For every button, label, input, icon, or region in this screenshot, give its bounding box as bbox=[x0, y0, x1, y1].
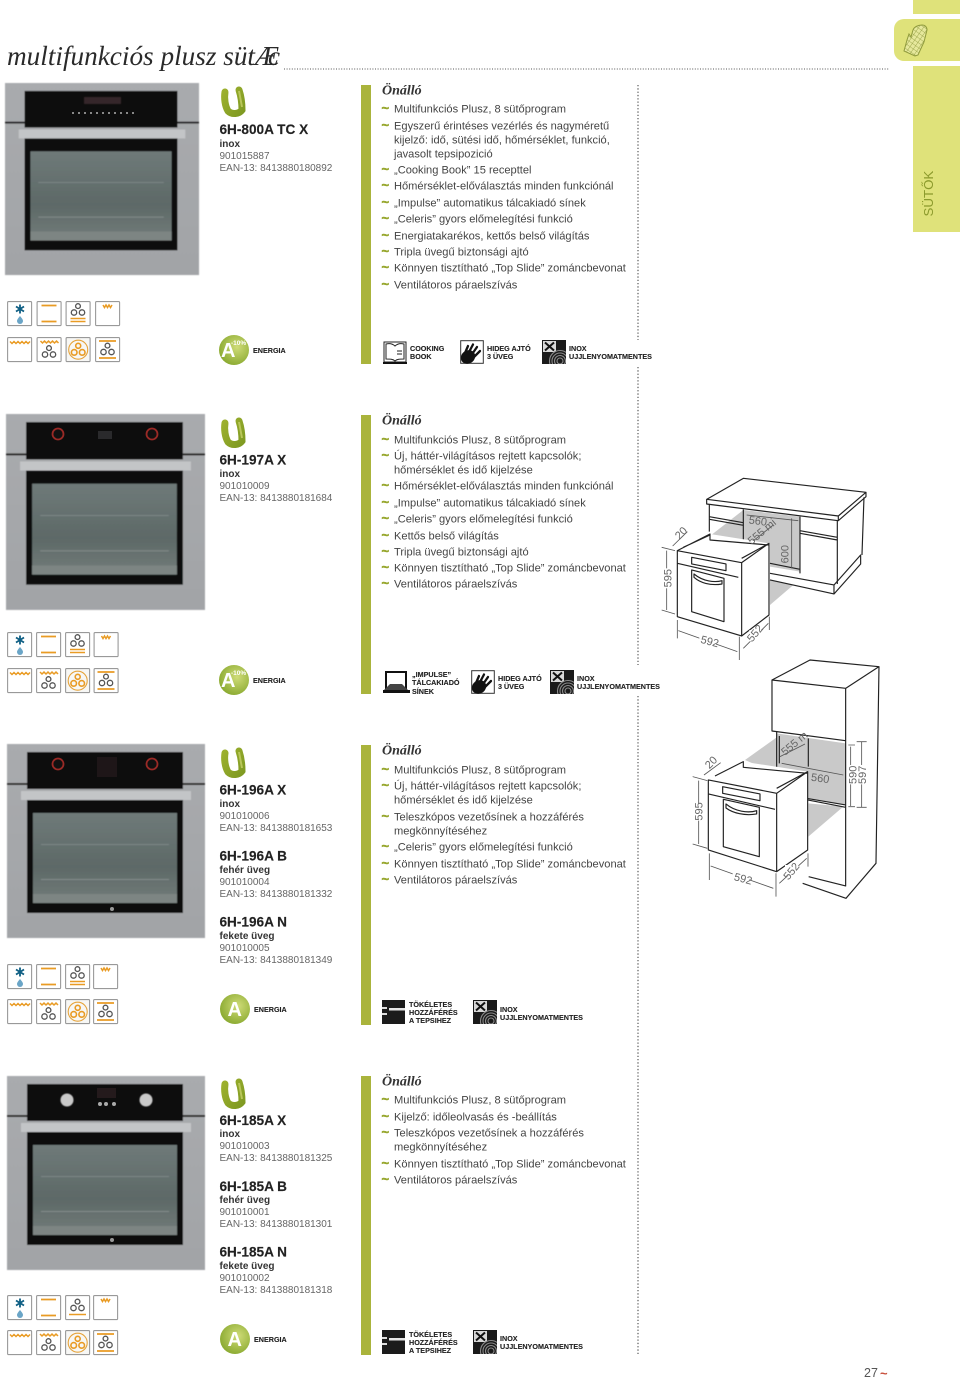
feature list: ~ bbox=[382, 778, 390, 792]
feature list bbox=[382, 742, 626, 886]
dimensions: 590 bbox=[848, 766, 860, 784]
feature: cold door: 3 ÜVEG bbox=[487, 352, 514, 361]
feature list: ~ bbox=[382, 1108, 390, 1124]
model info: 901010005 bbox=[220, 943, 270, 954]
model info: 901010006 bbox=[220, 811, 270, 822]
feature list bbox=[382, 412, 626, 590]
model info: fekete üveg bbox=[220, 931, 275, 942]
feature: cooking book: COOKING bbox=[410, 344, 445, 353]
dimensions: 552 bbox=[781, 861, 802, 883]
feature list: „Cooking Book” 15 recepttel bbox=[394, 164, 532, 176]
oven photo bbox=[7, 1076, 205, 1270]
feature list: Multifunkciós Plusz, 8 sütőprogram bbox=[394, 1094, 566, 1106]
feature list: Önálló bbox=[382, 742, 422, 758]
model info: EAN-13: 8413880181301 bbox=[220, 1219, 333, 1230]
feature: impulse rails bbox=[383, 670, 460, 696]
brand logo bbox=[225, 421, 242, 445]
feature list: Könnyen tisztítható „Top Slide” zománcbevonat bbox=[394, 262, 626, 274]
model info: EAN-13: 8413880181318 bbox=[220, 1285, 333, 1296]
energy badge: ENERGIA bbox=[254, 1335, 287, 1344]
model info: 901015887 bbox=[220, 151, 270, 162]
feature list: Hőmérséklet-előválasztás minden funkciónál bbox=[394, 480, 614, 492]
feature: cold door: HIDEG AJTÓ bbox=[498, 674, 542, 683]
energy badge: A bbox=[228, 1329, 242, 1351]
feature list: ~ bbox=[382, 560, 390, 574]
dimensions: 555 mi bbox=[746, 517, 779, 547]
feature list: Könnyen tisztítható „Top Slide” zománcbevonat bbox=[394, 1158, 626, 1170]
feature list: kijelző: idő, sütési idő, hőmérséklet, funkció, bbox=[394, 134, 610, 146]
feature list: ~ bbox=[382, 210, 390, 226]
side tab: section label bbox=[913, 66, 960, 232]
energy badge bbox=[220, 994, 287, 1024]
page number: ~ bbox=[880, 1366, 888, 1381]
oven photo bbox=[6, 414, 205, 610]
feature list: ~ bbox=[382, 194, 390, 210]
energy badge: A bbox=[221, 670, 235, 692]
dimensions: 552 bbox=[745, 623, 766, 645]
green bar bbox=[361, 415, 371, 694]
oven photo bbox=[7, 744, 205, 938]
feature: fingerprint-free inox: INOX bbox=[569, 344, 587, 353]
model info bbox=[220, 1113, 333, 1296]
model info bbox=[220, 122, 333, 174]
brand logo bbox=[225, 1082, 242, 1106]
dimensions: 597 bbox=[857, 766, 869, 784]
dimensions: 592 bbox=[733, 871, 753, 888]
model info: 6H-800A TC X bbox=[220, 122, 308, 137]
model info: fehér üveg bbox=[220, 865, 270, 876]
feature list: Ventilátoros páraelszívás bbox=[394, 280, 518, 292]
cabinet bbox=[707, 478, 866, 605]
feature list: Teleszkópos vezetősínek a hozzáférés bbox=[394, 812, 584, 824]
energy badge: ENERGIA bbox=[253, 676, 286, 685]
feature list: „Celeris” gyors előmelegítési funkció bbox=[394, 842, 573, 854]
title: multifunkciós plusz süt bbox=[7, 41, 257, 71]
feature list: Ventilátoros páraelszívás bbox=[394, 1174, 518, 1186]
model info bbox=[220, 452, 333, 504]
oven unit bbox=[677, 534, 769, 636]
feature list: „Impulse” automatikus tálcakiadó sínek bbox=[394, 498, 586, 510]
energy badge: ENERGIA bbox=[253, 346, 286, 355]
feature: cold door bbox=[458, 341, 531, 367]
feature list: megkönnyítéséhez bbox=[394, 826, 487, 838]
page number bbox=[864, 1366, 888, 1381]
dimensions: 560 bbox=[810, 772, 830, 786]
feature list: ~ bbox=[382, 838, 390, 854]
feature: fingerprint-free inox: UJJLENYOMATMENTES bbox=[500, 1342, 583, 1351]
side tab: section label: SÜTŐK bbox=[921, 171, 936, 216]
feature list: ~ bbox=[382, 100, 390, 116]
feature: full access bbox=[382, 1330, 458, 1355]
side tab: oven mitt icon bbox=[894, 19, 960, 61]
feature list: Teleszkópos vezetősínek a hozzáférés bbox=[394, 1128, 584, 1140]
feature list: ~ bbox=[382, 544, 390, 558]
feature: cooking book: BOOK bbox=[410, 352, 432, 361]
model info: 6H-196A X bbox=[220, 782, 286, 798]
feature list: Energiatakarékos, kettős belső világítás bbox=[394, 230, 590, 242]
model info: inox bbox=[220, 1129, 240, 1140]
feature list: Ventilátoros páraelszívás bbox=[394, 578, 518, 590]
model info: inox bbox=[220, 469, 240, 480]
green bar bbox=[361, 745, 371, 1025]
feature list: Könnyen tisztítható „Top Slide” zománcbevonat bbox=[394, 562, 626, 574]
model info: EAN-13: 8413880181684 bbox=[220, 493, 333, 504]
model info: EAN-13: 8413880181325 bbox=[220, 1153, 333, 1164]
feature list: ~ bbox=[382, 228, 390, 242]
panel: 6H-185A bbox=[7, 1072, 626, 1362]
model info: EAN-13: 8413880181653 bbox=[220, 823, 333, 834]
feature: fingerprint-free inox: INOX bbox=[500, 1005, 518, 1014]
dotted dividers bbox=[637, 85, 639, 1355]
green bar bbox=[361, 1076, 371, 1355]
function icons bbox=[8, 1296, 118, 1355]
dimensions: 20 bbox=[673, 525, 690, 542]
feature: fingerprint-free inox bbox=[542, 340, 652, 372]
feature: fingerprint-free inox bbox=[473, 1000, 583, 1032]
model info: EAN-13: 8413880181349 bbox=[220, 955, 333, 966]
feature: cold door: HIDEG AJTÓ bbox=[487, 344, 531, 353]
feature: fingerprint-free inox: UJJLENYOMATMENTES bbox=[569, 352, 652, 361]
feature list: ~ bbox=[382, 178, 390, 192]
model info: 6H-196A N bbox=[220, 914, 287, 930]
side tab: top strip bbox=[913, 0, 960, 14]
model info: 6H-197A X bbox=[220, 452, 286, 468]
model info: 6H-185A B bbox=[220, 1179, 287, 1194]
feature list: Önálló bbox=[382, 412, 422, 428]
model info: 901010001 bbox=[220, 1207, 270, 1218]
model info: inox bbox=[220, 139, 240, 150]
feature: impulse rails: TÁLCAKIADÓ bbox=[412, 678, 460, 687]
feature list: ~ bbox=[382, 576, 390, 590]
feature: fingerprint-free inox: UJJLENYOMATMENTES bbox=[577, 682, 660, 691]
model info: 6H-196A B bbox=[220, 848, 287, 864]
feature list: Könnyen tisztítható „Top Slide” zománcbevonat bbox=[394, 858, 626, 870]
feature list: hőmérséklet és idő kijelzése bbox=[394, 464, 533, 476]
dimensions bbox=[662, 514, 792, 660]
cabinet bbox=[745, 660, 879, 898]
feature: impulse rails: „IMPULSE” bbox=[412, 670, 452, 679]
feature list: ~ bbox=[382, 1156, 390, 1170]
energy badge bbox=[219, 335, 286, 365]
feature: full access: TÖKÉLETES bbox=[409, 1330, 452, 1339]
dimensions: 595 bbox=[694, 802, 706, 821]
panel: 6H-196A bbox=[7, 660, 879, 1032]
model info: 901010009 bbox=[220, 481, 270, 492]
feature list: „Celeris” gyors előmelegítési funkció bbox=[394, 514, 573, 526]
feature: cold door bbox=[469, 671, 542, 697]
feature list: ~ bbox=[382, 494, 390, 510]
feature list: Hőmérséklet-előválasztás minden funkciónál bbox=[394, 180, 614, 192]
feature list: ~ bbox=[382, 1124, 390, 1140]
oven photo bbox=[5, 83, 199, 275]
feature list bbox=[382, 1072, 626, 1186]
panel: 6H-197A X bbox=[6, 412, 866, 702]
energy badge bbox=[220, 1324, 287, 1354]
dimensions: 20 bbox=[703, 754, 720, 771]
feature list: ~ bbox=[382, 762, 390, 776]
model info: 6H-185A N bbox=[220, 1244, 287, 1260]
feature list: ~ bbox=[382, 528, 390, 542]
panel: 6H-800A TC X bbox=[5, 82, 652, 372]
feature: impulse rails: SÍNEK bbox=[412, 687, 435, 696]
dimensions: 600 bbox=[780, 545, 792, 563]
feature list: Kijelző: időleolvasás és -beállítás bbox=[394, 1112, 557, 1124]
feature list: Multifunkciós Plusz, 8 sütőprogram bbox=[394, 434, 566, 446]
feature list: Kettős belső világítás bbox=[394, 530, 499, 542]
feature list: ~ bbox=[382, 260, 390, 274]
model info bbox=[220, 782, 333, 966]
model info: fekete üveg bbox=[220, 1261, 275, 1272]
green bar bbox=[361, 85, 371, 364]
feature list: „Impulse” automatikus tálcakiadó sínek bbox=[394, 198, 586, 210]
energy badge: A bbox=[228, 999, 242, 1021]
dimensions: 555 m bbox=[779, 729, 810, 758]
feature list: Egyszerű érintéses vezérlés és nagyméretű bbox=[394, 120, 609, 132]
feature list: ~ bbox=[382, 510, 390, 526]
feature: fingerprint-free inox: INOX bbox=[500, 1334, 518, 1343]
feature list: „Celeris” gyors előmelegítési funkció bbox=[394, 214, 573, 226]
model info: EAN-13: 8413880181332 bbox=[220, 889, 333, 900]
energy badge: A bbox=[221, 340, 235, 362]
feature list bbox=[382, 82, 626, 292]
feature: fingerprint-free inox bbox=[473, 1330, 583, 1362]
page number: 27 bbox=[864, 1366, 878, 1380]
feature list: ~ bbox=[382, 856, 390, 870]
feature: full access: HOZZÁFÉRÉS bbox=[409, 1008, 458, 1017]
feature: full access: TÖKÉLETES bbox=[409, 1000, 452, 1009]
feature list: ~ bbox=[382, 276, 390, 292]
model info: 901010002 bbox=[220, 1273, 270, 1284]
feature list: Multifunkciós Plusz, 8 sütőprogram bbox=[394, 104, 566, 116]
feature: fingerprint-free inox bbox=[550, 670, 660, 702]
energy badge: -10% bbox=[231, 340, 246, 347]
feature list: ~ bbox=[382, 1092, 390, 1106]
feature: full access bbox=[382, 1000, 458, 1025]
feature list: ~ bbox=[382, 244, 390, 258]
model info: EAN-13: 8413880180892 bbox=[220, 163, 333, 174]
feature: fingerprint-free inox: UJJLENYOMATMENTES bbox=[500, 1013, 583, 1022]
feature list: hőmérséklet és idő kijelzése bbox=[394, 794, 533, 806]
feature list: Tripla üvegű biztonsági ajtó bbox=[394, 546, 529, 558]
feature list: ~ bbox=[382, 162, 390, 176]
function icons bbox=[8, 965, 118, 1024]
feature list: Tripla üvegű biztonsági ajtó bbox=[394, 246, 529, 258]
energy badge bbox=[219, 665, 286, 695]
feature list: ~ bbox=[382, 872, 390, 886]
feature: full access: A TEPSIHEZ bbox=[409, 1016, 452, 1025]
brand logo bbox=[225, 90, 242, 114]
feature: full access: HOZZÁFÉRÉS bbox=[409, 1338, 458, 1347]
model info: 901010004 bbox=[220, 877, 270, 888]
feature: fingerprint-free inox: INOX bbox=[577, 674, 595, 683]
dimensions: 560 bbox=[748, 514, 768, 529]
function icons bbox=[8, 633, 118, 693]
brand logo bbox=[225, 751, 242, 775]
feature list: megkönnyítéséhez bbox=[394, 1142, 487, 1154]
feature list: javasolt tepsipozició bbox=[393, 148, 493, 160]
feature list: ~ bbox=[382, 478, 390, 492]
dimensions: 592 bbox=[699, 634, 720, 650]
feature list: ~ bbox=[382, 808, 390, 824]
title: Æ bbox=[253, 41, 279, 71]
feature: cold door: 3 ÜVEG bbox=[498, 682, 525, 691]
feature list: ~ bbox=[382, 432, 390, 446]
energy badge: ENERGIA bbox=[254, 1005, 287, 1014]
feature list: ~ bbox=[382, 448, 390, 462]
installation diagram: tall cabinet bbox=[693, 660, 879, 898]
feature list: Önálló bbox=[382, 82, 422, 98]
feature list: Új, háttér-világításos rejtett kapcsolók; bbox=[394, 780, 581, 792]
feature list: Multifunkciós Plusz, 8 sütőprogram bbox=[394, 764, 566, 776]
model info: 6H-185A X bbox=[220, 1113, 286, 1128]
feature list: Önálló bbox=[382, 1072, 422, 1090]
model info: inox bbox=[220, 799, 240, 810]
feature list: ~ bbox=[382, 118, 390, 132]
model info: 901010003 bbox=[220, 1141, 270, 1152]
title: c bbox=[268, 41, 280, 71]
energy badge: -10% bbox=[231, 670, 246, 677]
dimensions: 595 bbox=[663, 569, 675, 587]
feature list: Új, háttér-világításos rejtett kapcsolók; bbox=[394, 450, 581, 462]
model info: fehér üveg bbox=[220, 1195, 270, 1206]
installation diagram: under-counter bbox=[662, 478, 866, 660]
feature: full access: A TEPSIHEZ bbox=[409, 1346, 452, 1355]
function icons bbox=[8, 302, 120, 362]
feature: cooking book bbox=[383, 342, 445, 363]
feature list: ~ bbox=[382, 1172, 390, 1186]
dimensions bbox=[693, 729, 869, 897]
feature list: Ventilátoros páraelszívás bbox=[394, 874, 518, 886]
oven unit bbox=[708, 762, 808, 872]
